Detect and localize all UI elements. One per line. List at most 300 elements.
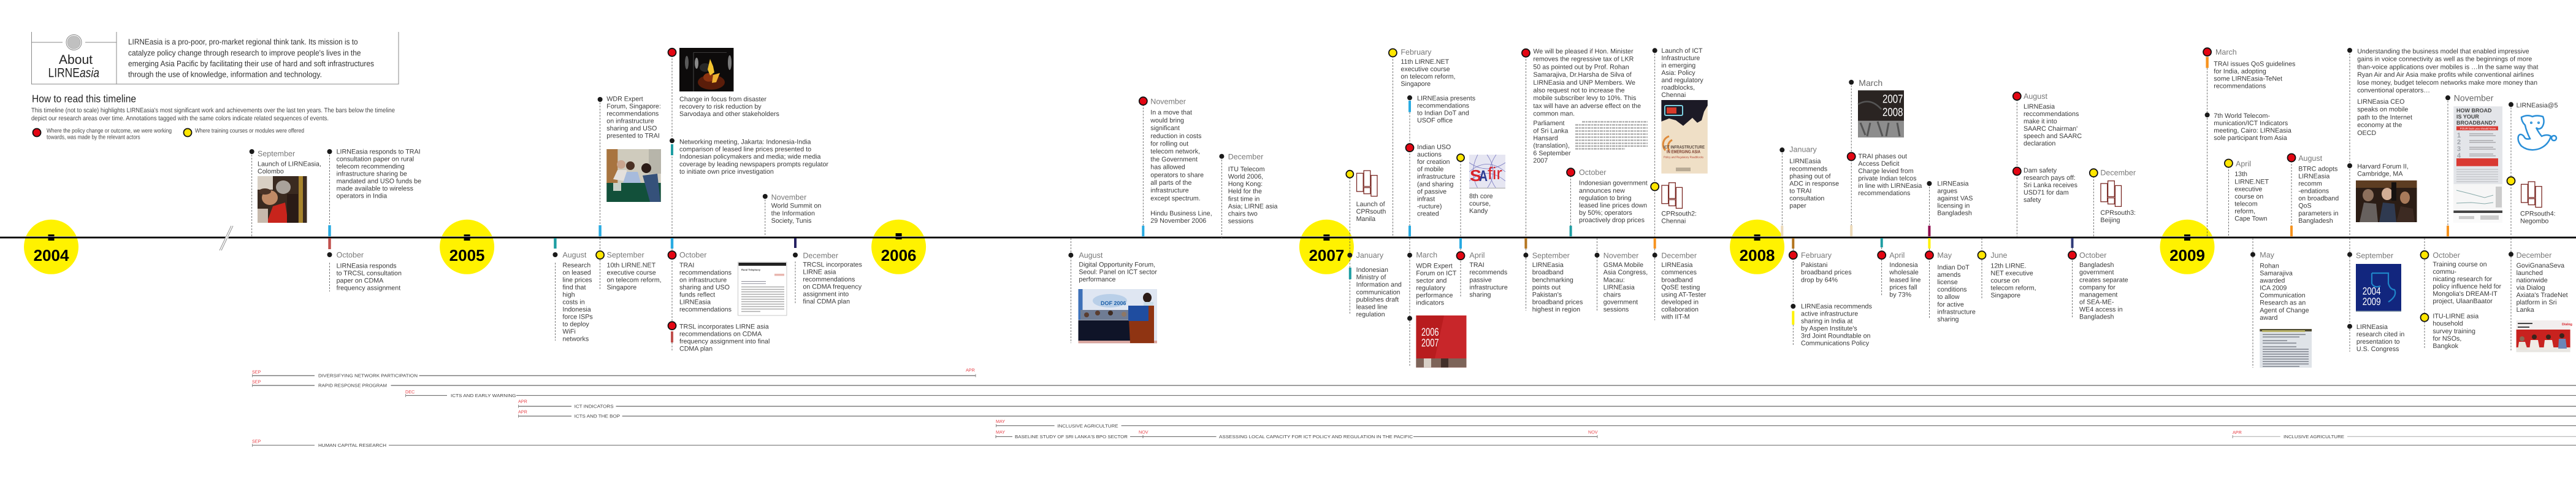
event: TRAI phases out ADC: in line with LIRNEasia xyxy=(1858,182,1922,190)
event: November 2007 GSMA Macau: sessions xyxy=(1603,306,1629,313)
event: November 2006 Hindu Business Line quote: would bring xyxy=(1150,117,1184,124)
event: March 2007 WDR Expert Forum: performance xyxy=(1416,292,1453,300)
event: August 2005 leased lines research: Research xyxy=(562,262,590,269)
event: November 2007 GSMA Macau: chairs xyxy=(1603,291,1621,298)
event: TRAI phases out ADC: Access Deficit xyxy=(1858,160,1900,168)
event: March 2007 WDR Expert Forum: March xyxy=(1416,250,1437,259)
bar: Baseline study of Sri Lanka's BPO sector xyxy=(996,430,1217,439)
icon: CPRsouth logo xyxy=(2101,181,2122,206)
event: April 2009 13th LIRNE.NET xyxy=(2225,160,2269,236)
event: August 2008 SAARC: SAARC Chairman' xyxy=(2024,125,2077,133)
event: October 2005 TRAI recommendations: recommendations xyxy=(679,306,732,314)
bar: Diversifying Network Participation: APR xyxy=(966,367,975,373)
event: CPRsouth4 Negombo xyxy=(2507,177,2556,236)
event: OECD mobile path quote: gains in voice connectivity as well as the beginnings of more xyxy=(2357,56,2532,63)
bar: Human Capital Research: SEP xyxy=(252,438,261,444)
event: April 2007 TRAI recommends: April xyxy=(1469,251,1485,260)
event: 8th core course Kandy: course, xyxy=(1469,200,1491,207)
panel: 2005 events xyxy=(552,48,862,353)
event: Harvard Forum II: Harvard Forum II, xyxy=(2357,163,2409,171)
bar: ICTs and the BOP: ICTS AND THE BOP xyxy=(575,414,620,419)
event: Indian USO auctions: of passive xyxy=(1417,188,1447,195)
event: WDR Expert Forum Singapore: Forum, Singapore: xyxy=(606,103,661,110)
event: Networking meeting Jakarta: Indonesian policymakers and media; wide media xyxy=(679,153,821,161)
event: September 2005 10th LIRNE.NET course: on telecom reform, xyxy=(607,277,662,284)
event: September 2007 broadband benchmarking: benchmarking xyxy=(1532,276,1573,284)
event: OECD mobile path quote: LIRNEasia CEO xyxy=(2357,98,2404,106)
event: February 2008 Pakistani broadband: drop by 64% xyxy=(1801,276,1838,284)
event: LIRNEasia cited in U.S. Congress: LIRNEasia xyxy=(2356,323,2388,331)
event: April 2009 13th LIRNE.NET: course on xyxy=(2234,193,2263,200)
panel: 2006 events xyxy=(1068,97,1278,343)
event: April 2009 13th LIRNE.NET: Cape Town xyxy=(2234,215,2268,222)
event: January 2008 phasing out ADC: paper xyxy=(1789,202,1806,209)
event: February 2008 Pakistani broadband: broadband prices xyxy=(1801,269,1852,276)
image: WDR forum photo xyxy=(606,149,661,202)
year: 2006 xyxy=(871,220,926,274)
event: August 2006 Digital Opportunity Forum xyxy=(1068,238,1157,343)
event: active infrastructure sharing in India: LIRNEasia recommends xyxy=(1801,303,1872,311)
text: mission statement xyxy=(128,37,374,79)
event: active infrastructure sharing in India: sharing in India at xyxy=(1801,318,1852,325)
event: January 2008 phasing out ADC: recommends xyxy=(1789,165,1827,172)
event: Launch of ICT infrastructure book: Launch of ICT xyxy=(1661,47,1703,55)
image: 2006-2007 report cover: 2007 xyxy=(1421,336,1439,349)
event: September 2007 broadband benchmarking: highest in region xyxy=(1532,306,1580,313)
event: TRAI rural consultation response: LIRNEasia responds to TRAI xyxy=(337,149,421,156)
event: WDR Expert Forum Singapore: sharing and USO xyxy=(606,125,657,133)
event: Networking meeting Jakarta: Networking meeting, Jakarta: Indonesia-India xyxy=(679,139,811,146)
event: October 2005 TRAI recommendations: sharing and USO xyxy=(679,284,730,292)
event: January 2007 Indonesian Ministry: Information and xyxy=(1356,281,1402,288)
event: Indian USO auctions: infrast xyxy=(1417,195,1435,203)
event: October 2007 Indonesian regulation: Indonesian government xyxy=(1579,180,1648,187)
event: active infrastructure sharing in India: active infrastructure xyxy=(1801,311,1858,318)
event: Networking meeting Jakarta: to initiate own price investigation xyxy=(679,168,774,176)
icon: CPRsouth logo xyxy=(1356,171,1377,196)
event: February 2007 11th LIRNE.NET course: 11th LIRNE.NET xyxy=(1401,58,1450,66)
event: April 2007 TRAI recommends: sharing xyxy=(1469,291,1491,298)
event: October 2008 Bangladesh SEA-ME-WE4: Bangladesh xyxy=(2079,313,2114,320)
event: January 2008 phasing out ADC: consultation xyxy=(1789,195,1824,202)
event: ITU-LIRNEasia household survey training: household xyxy=(2433,320,2463,328)
bar: Inclusive Agriculture 2009: APR xyxy=(2233,430,2242,435)
event: December 2006 ITU Telecom World: chairs two xyxy=(1228,210,1258,217)
image: GoviGnanaSeva launch photo xyxy=(2517,320,2572,352)
event: December 2006 ITU Telecom World: first time in xyxy=(1228,195,1259,203)
event: Parliament Hansard quote: 2007 xyxy=(1533,157,1548,164)
image: How broad is your broadband poster: 4 xyxy=(2457,152,2461,160)
event: Indian USO auctions: -ructure) xyxy=(1417,203,1442,210)
event: December 2007 QoSE testing: commences xyxy=(1661,269,1697,276)
event: August 2005 leased lines research: Indonesia xyxy=(562,306,591,314)
event: December 2006 ITU Telecom World: Hong Kong: xyxy=(1228,180,1263,188)
image: 2007-2008 report cover: 2007 xyxy=(1882,93,1903,106)
event: November 2006 Hindu Business Line quote: reduction in costs xyxy=(1150,133,1201,140)
event: Launch of ICT infrastructure book: in emerging xyxy=(1661,62,1695,69)
bar: Inclusive Agriculture 2006 xyxy=(996,419,2576,428)
year: 2009 xyxy=(2160,220,2215,274)
event: March 2007 WDR Expert Forum: indicators xyxy=(1416,300,1444,307)
event: May 2009 ICA award: award xyxy=(2260,314,2277,322)
event: Parliament Hansard quote: We will be pleased if Hon. Minister xyxy=(1533,48,1634,55)
event: October 2008 Bangladesh SEA-ME-WE4: October xyxy=(2079,251,2106,260)
event: October 2008 Bangladesh SEA-ME-WE4: of SEA-ME- xyxy=(2079,298,2114,306)
event: November 2006 Hindu Business Line quote: telecom network, xyxy=(1150,148,1200,155)
event: October 2009 training course: October xyxy=(2433,251,2460,260)
timeline break mark xyxy=(220,226,233,250)
event: February 2007 11th LIRNE.NET course xyxy=(1389,48,1456,236)
event: Harvard Forum II xyxy=(2347,163,2417,236)
event: June 2008 12th LIRNE.NET xyxy=(1978,238,2036,300)
event: November 2009 How broad is your broadband: November xyxy=(2454,93,2494,103)
event: January 2007 Indonesian Ministry: January xyxy=(1356,251,1384,260)
event: Indian USO auctions: for creation xyxy=(1417,158,1450,166)
event: April 2007 TRAI recommends: passive xyxy=(1469,276,1492,284)
event: Networking meeting Jakarta xyxy=(670,138,828,236)
image: DOF 2006 photo: DOF 2006 xyxy=(1101,300,1126,306)
heading: About LIRNEasia xyxy=(48,53,99,80)
event: Indian USO auctions: (and sharing xyxy=(1417,180,1453,188)
event: February 2007 11th LIRNE.NET course: February xyxy=(1401,48,1432,56)
event: LIRNEasia presents to Indian DoT: USOF office xyxy=(1417,117,1453,125)
event: April 2007 TRAI recommends: infrastructure xyxy=(1469,284,1508,291)
event: April 2008 Indonesia leased lines xyxy=(1878,238,1921,298)
event: November 2006 Hindu Business Line quote: In a move that xyxy=(1150,109,1192,117)
event: November 2007 GSMA Macau: November xyxy=(1603,252,1638,260)
event: September 2007 broadband benchmarking xyxy=(1523,238,1583,313)
event: Indian USO auctions: Indian USO xyxy=(1417,144,1451,151)
event: December 2005 TRCSL: LIRNE asia xyxy=(803,269,836,276)
event: ITU-LIRNEasia household survey training: survey training xyxy=(2433,328,2475,335)
event: Launch of ICT infrastructure book: Infrastructure xyxy=(1661,55,1700,62)
event: September 2007 broadband benchmarking: broadband prices xyxy=(1532,298,1583,306)
event: August 2005 leased lines research: August xyxy=(562,250,587,259)
event: Indian USO auctions xyxy=(1405,144,1455,236)
bar: ICTs and Early Warning: DEC xyxy=(405,389,415,395)
event: March 2007 WDR Expert Forum xyxy=(1407,238,1466,368)
event: August 2008 SAARC: speech and SAARC xyxy=(2024,133,2082,140)
bar: Assessing local capacity for ICT policy xyxy=(1219,430,1598,439)
event: November 2005 WSIS: the Information xyxy=(771,210,815,217)
event: August 2008 SAARC: LIRNEasia xyxy=(2024,103,2055,110)
event: August 2005 leased lines research: costs in xyxy=(562,299,585,306)
event: November 2007 GSMA Macau: Macau: xyxy=(1603,276,1625,284)
event: May 2009 ICA award: Communication xyxy=(2260,292,2306,300)
event: June 2008 12th LIRNE.NET: 12th LIRNE. xyxy=(1990,263,2027,270)
event: October 2008 Bangladesh SEA-ME-WE4: government xyxy=(2079,269,2114,276)
image: Safir logo: A xyxy=(1479,168,1488,185)
event: TRSL incorporates recommendations: frequency assignment into final xyxy=(679,338,770,346)
event: December 2009 GoviGnanaSeva: via Dialog xyxy=(2517,284,2545,292)
event: TRSL incorporates recommendations xyxy=(668,322,770,353)
event: TRAI rural consultation response: operators in India xyxy=(337,193,387,200)
image: Hansard clipping xyxy=(1575,122,1648,149)
image: How broad is your broadband poster: 1 xyxy=(2457,132,2461,139)
event: December 2005 TRCSL: on CDMA frequency xyxy=(803,284,862,291)
bar: Inclusive Agriculture 2009: INCLUSIVE AGRICULTURE xyxy=(2284,434,2344,439)
event: August 2009 BTRC adopts: -endations xyxy=(2298,188,2329,195)
event: February 2008 Pakistani broadband: Pakistani xyxy=(1801,261,1827,269)
event: December 2009 GoviGnanaSeva: platform in Sri xyxy=(2517,299,2557,306)
event: June 2008 12th LIRNE.NET: telecom reform, xyxy=(1990,285,2036,292)
bar: Baseline study of Sri Lanka's BPO sector: BASELINE STUDY OF SRI LANKA'S BPO SECTOR xyxy=(1015,434,1128,439)
event: Launch of CPRsouth Manila: CPRsouth xyxy=(1356,208,1386,215)
event: Dam safety research: USD71 for dam xyxy=(2024,189,2069,196)
event: October 2008 Bangladesh SEA-ME-WE4: WE4 access in xyxy=(2079,306,2123,313)
event: April 2008 Indonesia leased lines: leased line xyxy=(1889,276,1921,284)
image: ICT Infrastructure book cover xyxy=(1661,100,1708,174)
event: LIRNEasia presents to Indian DoT: recommendations xyxy=(1417,102,1469,110)
legend: training marker xyxy=(184,128,304,136)
event: April 2008 Indonesia leased lines: prices fall xyxy=(1889,284,1917,291)
legend: policy change marker xyxy=(33,128,172,141)
event: October 2005 TRAI recommendations: recommendations xyxy=(679,269,732,277)
event: October 2004 TRCSL response: frequency assignment xyxy=(337,285,400,292)
event: February 2007 11th LIRNE.NET course: Singapore xyxy=(1401,80,1431,88)
event: OECD mobile path quote: than-voice applications over mobiles is …In the same way that xyxy=(2357,63,2538,71)
image: How broad is your broadband poster: IS YOUR xyxy=(2456,114,2479,120)
event: October 2004 TRCSL response: to TRCSL consultation xyxy=(337,270,402,277)
event: October 2007 Indonesian regulation: regulation to bring xyxy=(1579,195,1632,202)
event: LIRNEasia argues against VAS licensing: against VAS xyxy=(1937,195,1973,203)
image: Harvard forum photo xyxy=(2356,180,2417,222)
event: August 2006 Digital Opportunity Forum: performance xyxy=(1079,276,1115,284)
event: March 2007 WDR Expert Forum: regulatory xyxy=(1416,285,1446,292)
event: May 2008 Indian DoT: Indian DoT xyxy=(1937,264,1970,271)
event: August 2008 SAARC xyxy=(2013,92,2082,167)
event: Launch of CPRsouth Manila: Launch of xyxy=(1356,201,1385,208)
event: TRAI phases out ADC: private Indian telcos xyxy=(1858,175,1916,182)
event: November 2007 GSMA Macau: GSMA Mobile xyxy=(1603,261,1643,269)
event: December 2008 CPRsouth3: Beijing xyxy=(2100,217,2120,224)
year: 2005: 2005 xyxy=(449,246,485,265)
image: 2004-2009 report cover xyxy=(2356,264,2401,312)
bar: Diversifying Network Participation: DIVERSIFYING NETWORK PARTICIPATION xyxy=(318,373,418,379)
event: October 2007 Indonesian regulation: by 50%; operators xyxy=(1579,209,1632,217)
event: 8th core course Kandy: Kandy xyxy=(1469,207,1488,215)
event: Indian USO auctions: infrastructure xyxy=(1417,173,1455,180)
event: Dam safety research: Sri Lanka receives xyxy=(2024,182,2077,189)
event: September 2005 10th LIRNE.NET course xyxy=(596,238,662,292)
event: Launch of ICT infrastructure book: Asia: Policy xyxy=(1661,69,1695,77)
event: Launch of CPRsouth Manila xyxy=(1346,171,1386,236)
event: August 2009 BTRC adopts: recomm xyxy=(2298,180,2322,188)
event: October 2004 TRCSL response xyxy=(327,238,402,292)
icon: CPRsouth logo xyxy=(2521,182,2542,207)
event: ITU-LIRNEasia household survey training: for NSOs, xyxy=(2433,335,2461,342)
bar: ICTs and Early Warning xyxy=(405,389,2576,398)
event: OECD mobile path quote: conventional operators… xyxy=(2357,87,2430,95)
event: February 2008 Pakistani broadband xyxy=(1789,238,1852,302)
event: Indian USO auctions: of mobile xyxy=(1417,166,1443,173)
event: August 2005 leased lines research: WiFi xyxy=(562,328,576,336)
event: WDR Expert Forum Singapore: WDR Expert xyxy=(606,96,643,103)
image: launch photo xyxy=(258,176,307,223)
event: January 2008 phasing out ADC: phasing out of xyxy=(1789,172,1830,180)
event: January 2007 Indonesian Ministry: communication xyxy=(1356,288,1401,296)
event: January 2008 phasing out ADC: January xyxy=(1789,145,1817,153)
event: WDR Expert Forum Singapore: recommendations xyxy=(606,110,659,118)
event: December 2007 QoSE testing: QoSE testing xyxy=(1661,284,1700,291)
event: September 2005 10th LIRNE.NET course: executive course xyxy=(607,269,656,277)
event: September 2007 broadband benchmarking: September xyxy=(1532,252,1570,260)
event: 8th core course Kandy xyxy=(1457,154,1505,236)
event: October 2005 TRAI recommendations: October xyxy=(679,250,706,259)
event: December 2006 ITU Telecom World: December xyxy=(1228,152,1263,161)
event: March 2007 WDR Expert Forum: sector and xyxy=(1416,277,1447,285)
bar: Human Capital Research xyxy=(252,438,2576,448)
event: September 2009 report xyxy=(2347,238,2401,323)
event: May 2009 ICA award: ICA 2009 xyxy=(2260,285,2287,292)
legend: policy change marker: towards, was made by the relevant actors xyxy=(47,134,140,141)
event: TRSL incorporates recommendations: CDMA plan xyxy=(679,346,713,353)
year: 2004: 2004 xyxy=(34,246,69,265)
event: September 2004 launch: Colombo xyxy=(258,168,284,176)
event: March 2009 TRAI QoS guidelines: recommendations xyxy=(2214,83,2266,90)
event: November 2006 Hindu Business Line quote xyxy=(1139,97,1212,236)
event: April 2009 13th LIRNE.NET: telecom xyxy=(2234,200,2258,207)
image: How broad is your broadband poster: 2 xyxy=(2457,139,2461,146)
year badges xyxy=(24,220,2215,274)
event: December 2009 GoviGnanaSeva: nationwide xyxy=(2517,277,2548,284)
event: September 2005 10th LIRNE.NET course: 10th LIRNE.NET xyxy=(607,262,656,269)
event: TRAI rural consultation response xyxy=(327,149,421,236)
event: February 2007 11th LIRNE.NET course: on telecom reform, xyxy=(1401,73,1456,80)
event: December 2005 TRCSL: December xyxy=(803,252,838,260)
panel: 2008 events xyxy=(1779,78,2136,347)
event: August 2008 SAARC: make it into xyxy=(2024,118,2057,125)
event: September 2005 10th LIRNE.NET course: Singapore xyxy=(607,284,636,292)
event: active infrastructure sharing in India: 3rd Joint Roundtable on xyxy=(1801,333,1871,340)
image: Safir logo: S xyxy=(1470,166,1481,185)
event: January 2008 phasing out ADC: ADC in response xyxy=(1789,180,1839,187)
event: August 2009 BTRC adopts: Bangladesh xyxy=(2298,217,2333,225)
event: 8th core course Kandy: 8th core xyxy=(1469,193,1493,200)
event: October 2008 Bangladesh SEA-ME-WE4 xyxy=(2068,238,2128,320)
event: OECD mobile path quote: path to the Internet xyxy=(2357,114,2412,121)
event: December 2006 ITU Telecom World: Asia; LIRNE asia xyxy=(1228,203,1278,210)
icon: Ganesha logo xyxy=(2518,115,2556,150)
event: CPRsouth4 Negombo: CPRsouth4: xyxy=(2520,211,2556,218)
event: December 2005 TRCSL: assignment into xyxy=(803,291,849,298)
event: May 2008 Indian DoT: conditions xyxy=(1937,286,1967,293)
event: November 2005 WSIS: World Summit on xyxy=(771,203,821,210)
event: Parliament Hansard quote: common man. xyxy=(1533,110,1575,118)
event: October 2009 training course xyxy=(2421,238,2502,314)
event: LIRNEasia@5: LIRNEasia@5 xyxy=(2517,102,2558,109)
image: How broad is your broadband poster: HOW BROAD xyxy=(2456,107,2492,114)
event: LIRNEasia argues against VAS licensing: argues xyxy=(1937,188,1957,195)
event: December 2005 TRCSL: final CDMA plan xyxy=(803,298,850,306)
event: October 2009 training course: project, UlaanBaator xyxy=(2433,298,2493,305)
image: 2006-2007 report cover: 2006 xyxy=(1421,326,1439,338)
image: Safir logo xyxy=(1469,155,1505,188)
bar: Rapid Response Program: SEP xyxy=(252,379,261,384)
event: January 2007 Indonesian Ministry: regulation xyxy=(1356,311,1385,318)
bar: Inclusive Agriculture 2006: INCLUSIVE AGRICULTURE xyxy=(1057,423,1118,428)
event: OECD mobile path quote: Ryan Air and Air Asia make profits while conventional airlines xyxy=(2357,71,2534,79)
event: December 2007 QoSE testing: December xyxy=(1661,252,1697,260)
event: Parliament Hansard quote: Hansard xyxy=(1533,135,1558,142)
bar: Inclusive Agriculture 2006: MAY xyxy=(996,419,1005,424)
event: August 2005 leased lines research: find that xyxy=(562,284,586,292)
image: GoviGnanaSeva launch photo: Dialog xyxy=(2562,323,2572,327)
event: TRAI phases out ADC: Charge levied from xyxy=(1858,168,1914,175)
event: ITU-LIRNEasia household survey training: ITU-LIRNE asia xyxy=(2433,313,2479,320)
event: May 2009 ICA award: May xyxy=(2260,250,2275,259)
image: How broad is your broadband poster xyxy=(2453,106,2502,222)
image: 2004-2009 report cover: 2009 xyxy=(2363,296,2381,307)
event: December 2005 TRCSL: recommendations xyxy=(803,276,855,284)
event: January 2008 phasing out ADC: LIRNEasia xyxy=(1789,158,1821,165)
event: May 2008 Indian DoT xyxy=(1925,238,1976,323)
event: October 2005 TRAI recommendations: LIRNEasia xyxy=(679,299,711,306)
bar: Diversifying Network Participation: SEP xyxy=(252,369,261,374)
image: 2007-2008 report cover xyxy=(1858,90,1904,137)
event: October 2009 training course: commu- xyxy=(2433,268,2456,276)
bar: Rapid Response Program xyxy=(252,379,2576,389)
event: October 2009 training course: policy influence held for xyxy=(2433,283,2502,290)
event: October 2004 TRCSL response: October xyxy=(337,250,364,259)
event: November 2007 GSMA Macau: LIRNEasia xyxy=(1603,284,1635,291)
event: Launch of ICT infrastructure book xyxy=(1653,47,1708,183)
event: May 2009 ICA award: Agent of Change xyxy=(2260,307,2309,314)
event: December 2005 TRCSL xyxy=(793,238,862,306)
event: August 2005 leased lines research: force ISPs xyxy=(562,314,593,321)
event: August 2009 BTRC adopts: on broadband xyxy=(2298,195,2339,203)
event: Launch of ICT infrastructure book: and regulatory xyxy=(1661,77,1703,84)
event: Dam safety research xyxy=(2013,167,2077,236)
event: February 2008 Pakistani broadband: February xyxy=(1801,251,1832,260)
event: Parliament Hansard quote: 6 September xyxy=(1533,150,1571,157)
event: March 2007 WDR Expert Forum: Forum on ICT xyxy=(1416,270,1457,277)
event: March 2008 report: March xyxy=(1859,78,1882,88)
event: LIRNEasia@5 xyxy=(2509,102,2558,178)
event: April 2008 Indonesia leased lines: April xyxy=(1889,251,1905,260)
event: LIRNEasia argues against VAS licensing: Bangladesh xyxy=(1937,210,1972,217)
year: 2006: 2006 xyxy=(881,246,917,265)
event: November 2006 Hindu Business Line quote: infrastructure xyxy=(1150,187,1189,195)
event: October 2007 Indonesian regulation: announces new xyxy=(1579,187,1625,195)
event: TRAI phases out ADC xyxy=(1848,152,1922,236)
text: how to read explanation xyxy=(31,107,395,122)
event: September 2005 10th LIRNE.NET course: September xyxy=(607,250,644,259)
event: August 2005 leased lines research: networks xyxy=(562,336,589,343)
event: December 2007 QoSE testing xyxy=(1653,238,1707,320)
event: Parliament Hansard quote xyxy=(1522,48,1648,236)
event: August 2009 BTRC adopts: August xyxy=(2298,154,2323,163)
event: August 2009 BTRC adopts: LIRNEasia xyxy=(2298,173,2329,180)
year: 2008 xyxy=(1730,220,1784,274)
image: Rural Telephony document: Rural Telephony xyxy=(741,268,761,271)
event: August 2008 SAARC: declaration xyxy=(2024,140,2055,147)
event: November 2006 Hindu Business Line quote: 29 November 2006 xyxy=(1150,217,1206,225)
event: April 2007 TRAI recommends: TRAI xyxy=(1469,261,1485,269)
event: December 2007 QoSE testing: developed in xyxy=(1661,298,1699,306)
event: Launch of ICT infrastructure book: Chennai xyxy=(1661,91,1686,99)
text: how to read explanation: depict our research areas over time. Annotations tagged with the same colors indicate related sequences of events. xyxy=(31,115,329,122)
event: April 2007 TRAI recommends: recommends xyxy=(1469,269,1507,276)
event: October 2007 Indonesian regulation: leased line prices down xyxy=(1579,202,1647,209)
event: active infrastructure sharing in India: by Aspen Institute's xyxy=(1801,325,1857,333)
event: October 2007 Indonesian regulation: proactively drop prices xyxy=(1579,217,1645,224)
event: May 2009 ICA award: Samarajiva xyxy=(2260,270,2293,277)
heading: About LIRNEasia: LIRNEasia xyxy=(48,66,99,80)
event: August 2005 leased lines research xyxy=(552,238,593,343)
icon: about badge xyxy=(66,34,82,50)
event: LIRNEasia presents to Indian DoT: to Indian DoT and xyxy=(1417,110,1469,117)
